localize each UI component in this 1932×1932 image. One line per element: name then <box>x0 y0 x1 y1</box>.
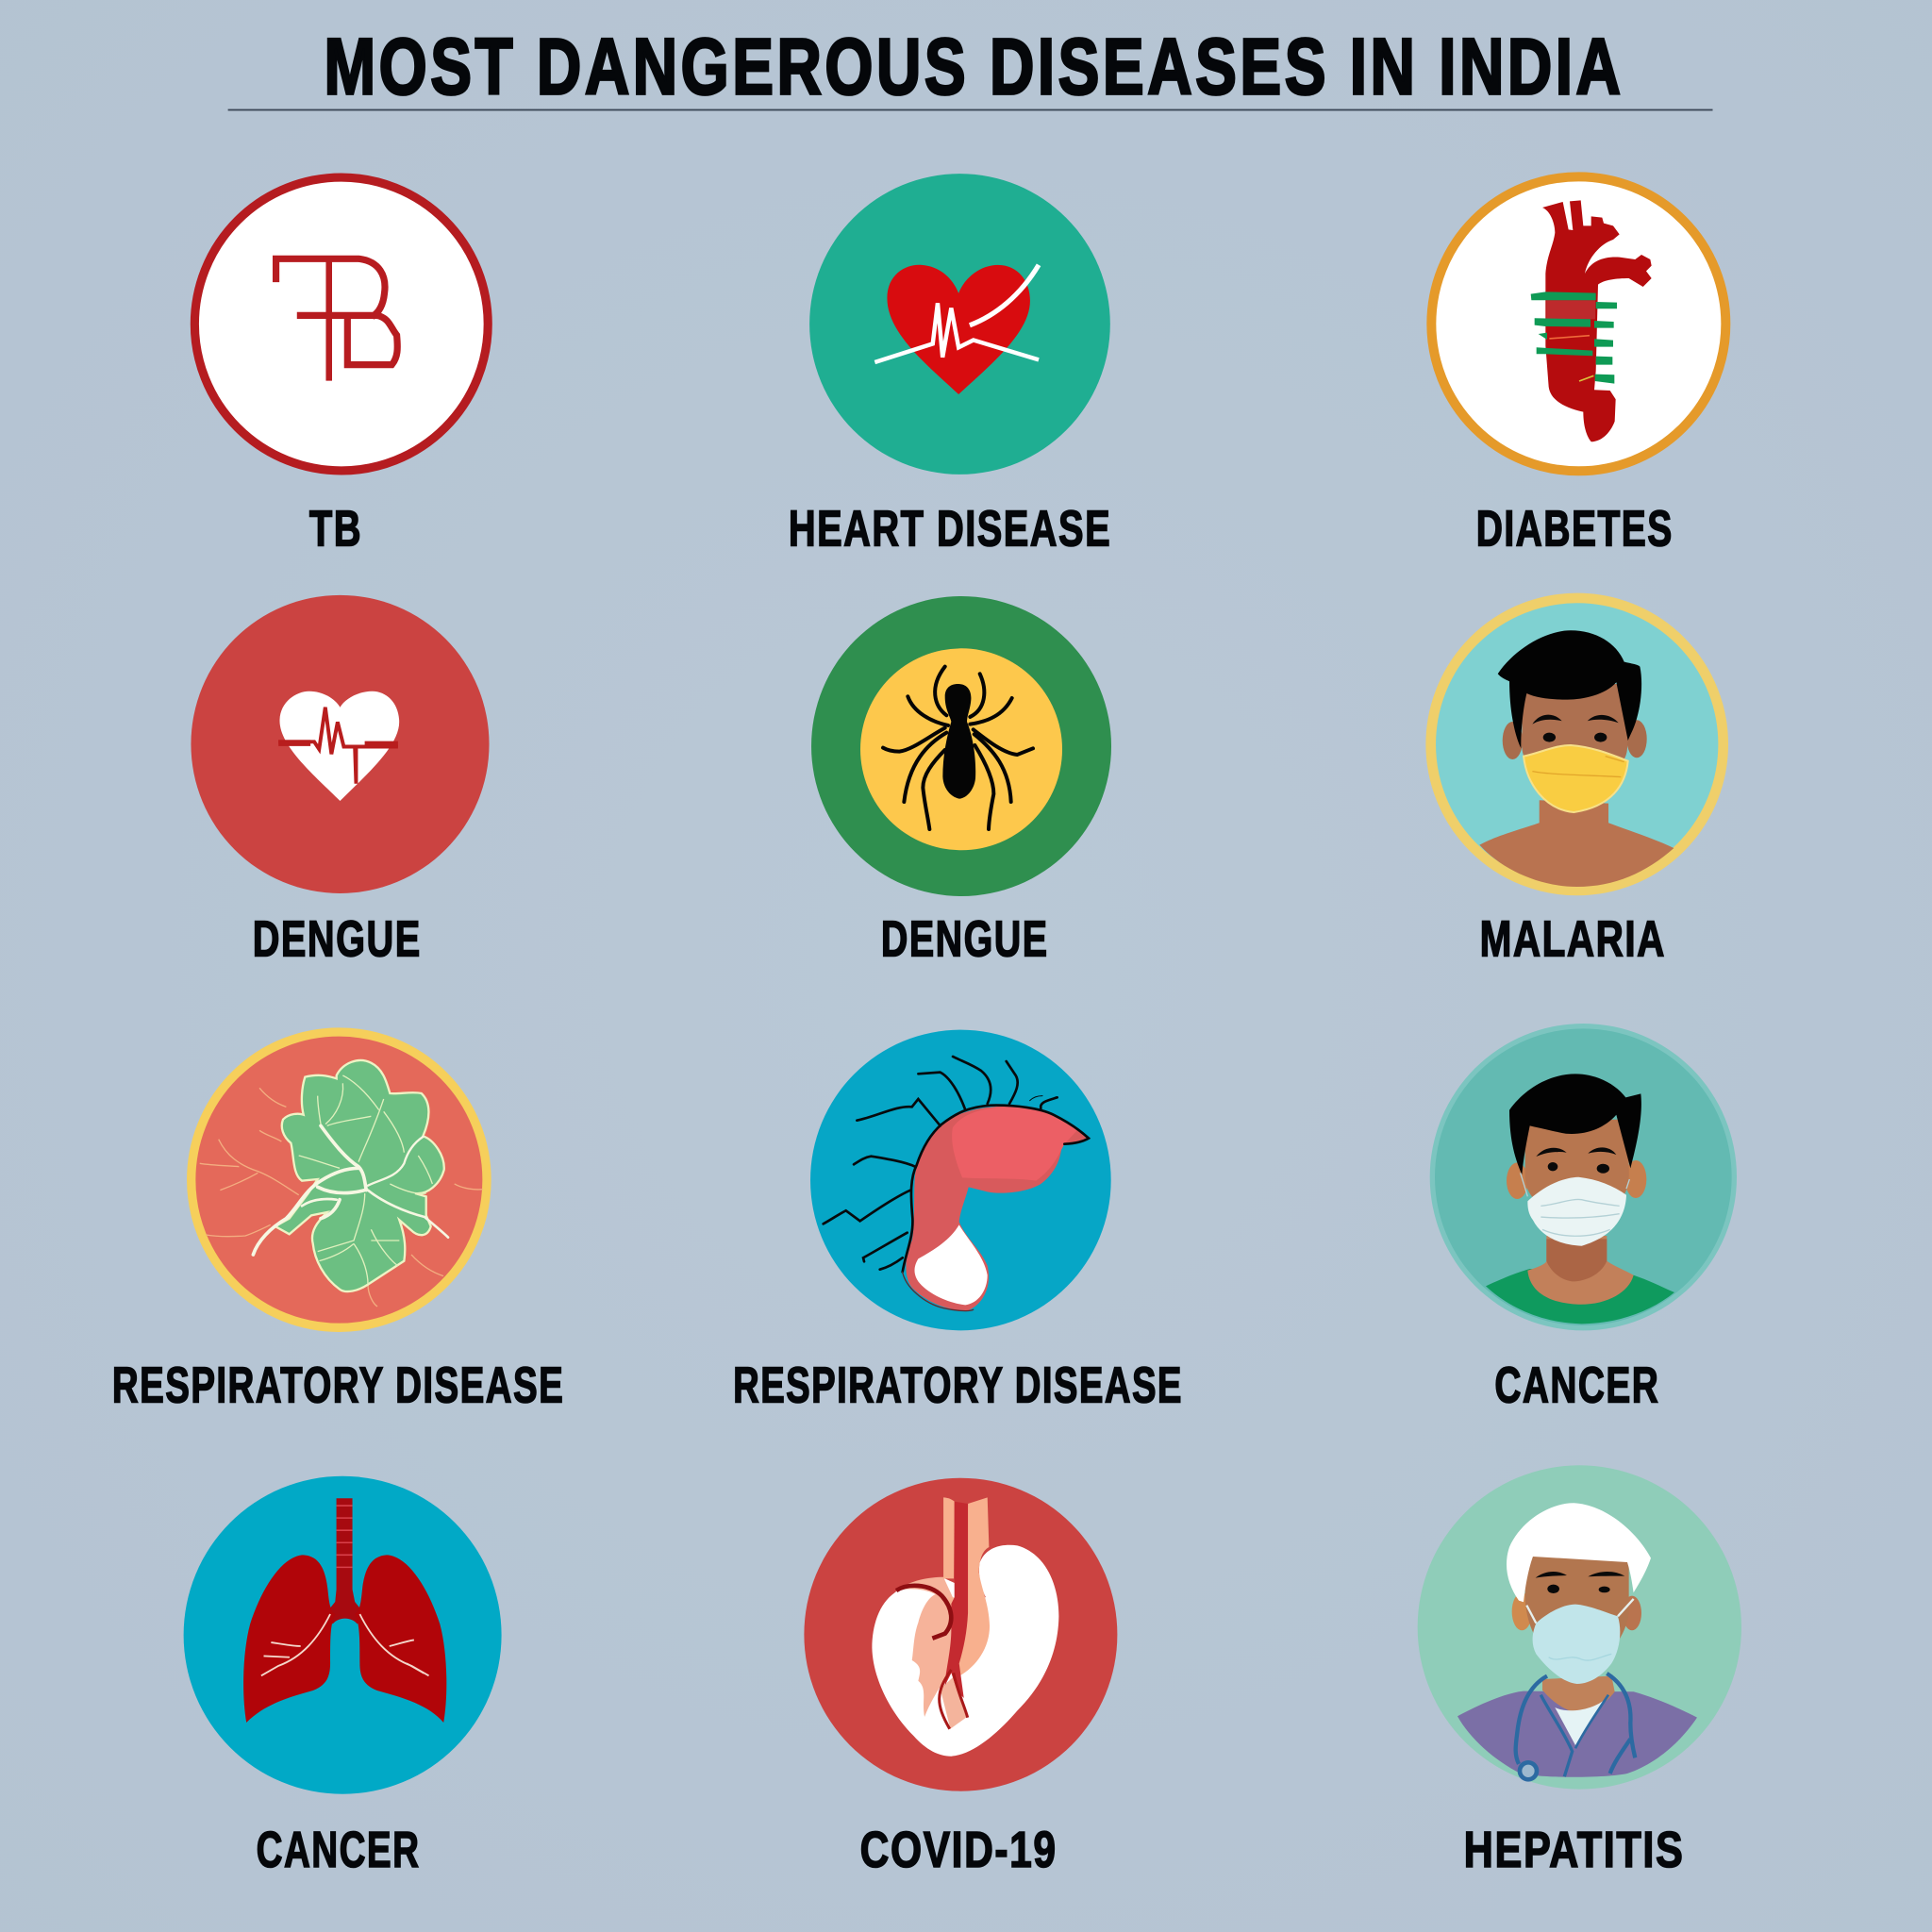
title underline <box>228 109 1713 110</box>
panel: malaria <box>1431 598 1724 968</box>
label: respiratory disease: RESPIRATORY DISEASE <box>112 1357 564 1413</box>
icon: white heart with pulse <box>191 595 490 893</box>
icon: red organ with white sac and black cracks <box>810 1030 1111 1330</box>
icon: artery with green bands <box>1431 176 1725 471</box>
icon: green leaf lung with veins <box>192 1032 487 1327</box>
panel: TB <box>194 177 488 558</box>
label: TB: TB <box>309 502 362 558</box>
panel: hepatitis doctor <box>1418 1465 1741 1878</box>
panel: dengue spider <box>811 596 1111 968</box>
icon: man with white mask <box>1430 1024 1737 1330</box>
panel: dengue red <box>191 595 490 968</box>
label: hepatitis: HEPATITIS <box>1464 1823 1684 1878</box>
label: dengue: DENGUE <box>253 912 422 968</box>
label: heart disease: HEART DISEASE <box>789 502 1111 558</box>
panel: diabetes <box>1431 176 1725 558</box>
icon: TB monogram badge <box>194 177 488 471</box>
label: dengue: DENGUE <box>881 912 1049 968</box>
label: covid-19: COVID-19 <box>860 1823 1058 1878</box>
panel: cancer lungs <box>184 1476 502 1878</box>
icon: insect on yellow disc <box>811 596 1111 896</box>
panel: respiratory disease organ <box>733 1030 1183 1413</box>
label: respiratory disease: RESPIRATORY DISEASE <box>733 1357 1183 1413</box>
label: cancer: CANCER <box>1494 1357 1659 1413</box>
panel: respiratory disease lung leaf <box>112 1032 564 1413</box>
icon: red lungs with trachea <box>184 1476 502 1794</box>
panel: heart disease <box>789 174 1111 558</box>
icon: heart with pulse <box>809 174 1110 475</box>
icon: white heart with vessels <box>804 1478 1117 1791</box>
icon: doctor with cap, mask and stethoscope <box>1418 1465 1741 1790</box>
label: diabetes: DIABETES <box>1476 502 1674 558</box>
panel: covid-19 <box>804 1478 1117 1878</box>
panel: cancer man <box>1430 1024 1737 1413</box>
label: cancer: CANCER <box>257 1823 420 1878</box>
icon: man with yellow mask <box>1431 598 1724 891</box>
label: malaria: MALARIA <box>1480 912 1666 968</box>
